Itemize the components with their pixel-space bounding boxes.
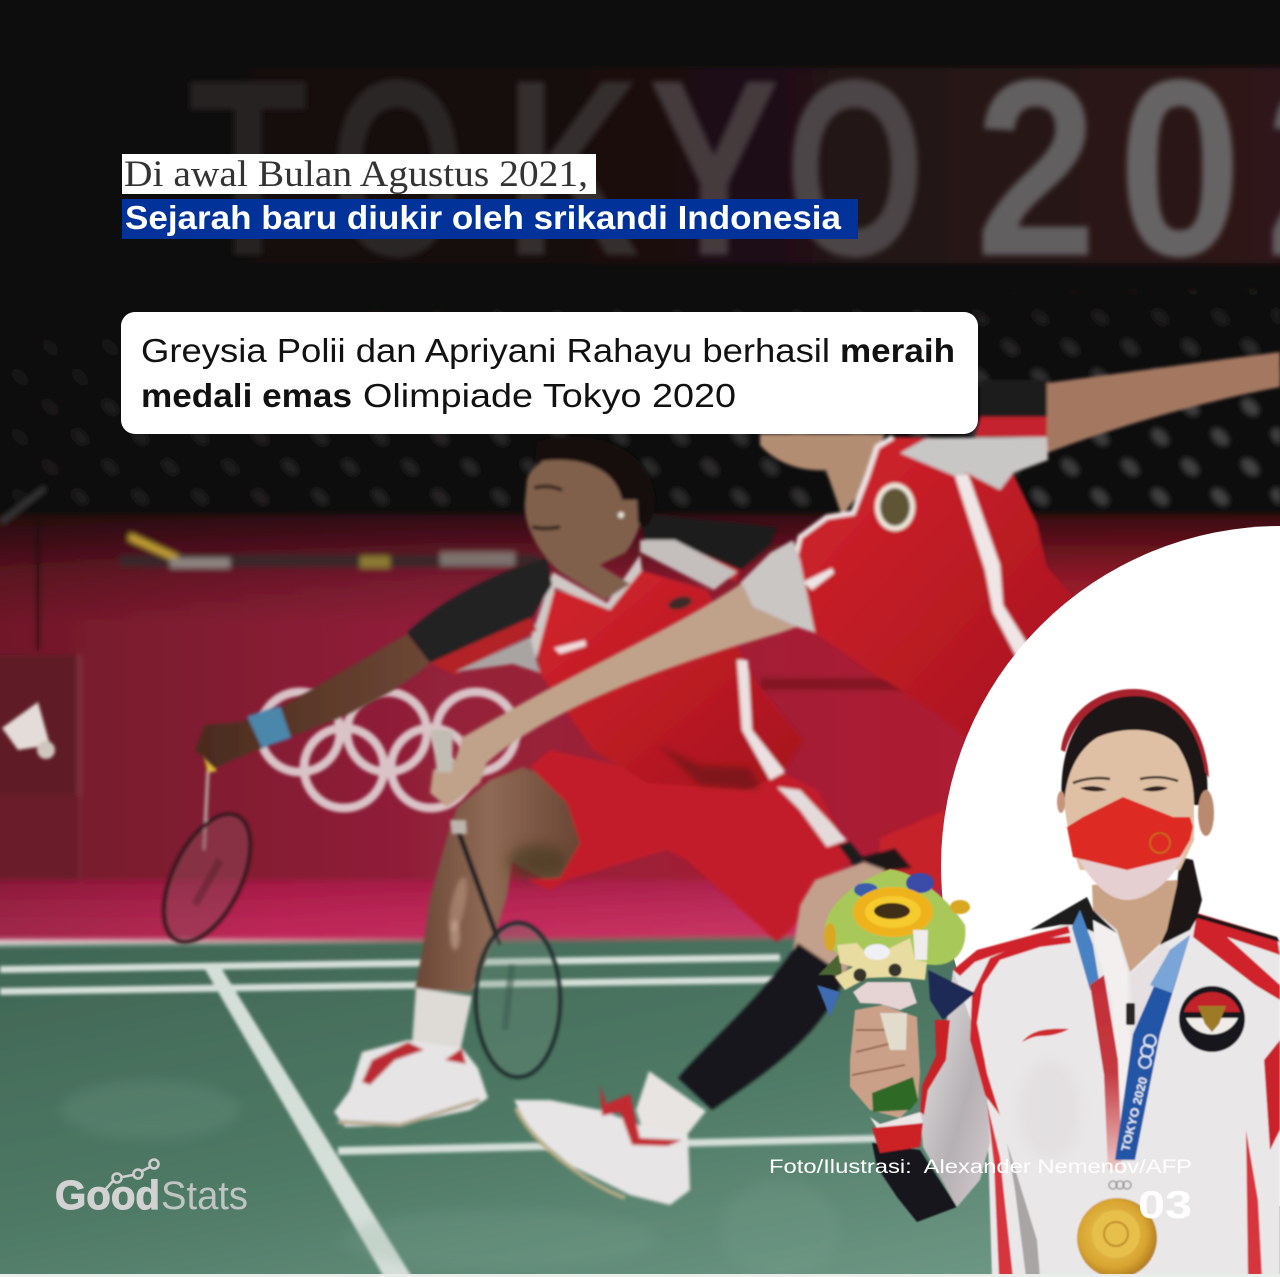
medal ribbon [1072,910,1100,990]
racket of right player [458,830,560,1077]
TOKYO 2020 banner lettering: 2 [975,28,1097,309]
jacket sleeve [920,970,990,1207]
court lines [0,954,880,1277]
sunflower [853,887,933,937]
TOKYO 2020 banner lettering: O [785,28,925,309]
wristband [247,706,291,748]
cream stem [880,1013,907,1050]
leaf stems [872,1077,918,1112]
raised arm [1047,352,1280,453]
shoulder panels [640,513,777,572]
player Apriyani [195,437,866,1127]
photo credit: Foto/Ilustrasi: Alexander Nemenov/AFP [769,1157,1192,1178]
shuttlecock [2,702,55,759]
red lower stripes [987,1103,1013,1277]
callout: meraih [840,332,955,369]
ears [1198,790,1214,836]
navy ribbon [928,970,975,1020]
heading line 2: Sejarah baru diukir oleh srikandi Indonesia [125,199,842,236]
heading [122,153,858,239]
dark sleeve [407,558,552,663]
headband [1061,689,1209,778]
logo trend line [105,1160,158,1190]
bouquet wrap [853,982,917,1010]
long arm [430,583,797,807]
TOKYO 2020 banner lettering: 0 [1118,28,1242,309]
small rings above medal [1109,1181,1131,1189]
callout: Greysia Polii dan Apriyani Rahayu berhasil [141,332,830,369]
gray shoulder panel [900,437,1048,490]
back leg thigh [793,862,885,990]
sock [412,988,472,1052]
TOKYO 2020 banner lettering: O [330,28,465,309]
Olympic rings on wall [260,692,516,808]
red cuff [872,1123,923,1153]
greenery [825,869,965,965]
jacket body [953,910,1280,1277]
mascot [835,930,928,990]
logo wordmark: Good [55,1172,160,1218]
zipper pull [1126,1003,1135,1025]
ribbon lettering: TOKYO 2020 [1118,1075,1150,1153]
logo on jersey [803,568,834,590]
gray sleeve [740,540,815,633]
TOKYO 2020 banner lettering: K [505,28,640,309]
inner collar [1093,920,1132,1100]
page number: 03 [1138,1184,1192,1227]
Indonesia emblem [1179,986,1245,1052]
black collar [1030,897,1118,942]
jersey [537,570,803,790]
black knee sleeve [678,943,842,1110]
ponytail and right collar [1160,857,1280,945]
edge highlights [0,1274,1280,1277]
grip [431,730,453,772]
emblem [875,483,915,531]
TOKYO 2020 banner lettering: Y [648,28,780,309]
neckline trim [793,437,893,567]
GoodStats logo: Stats [161,1174,248,1218]
court scuffs [60,1080,840,1277]
Li-Ning logo [1022,1029,1069,1042]
hair [1061,691,1207,805]
portrait: Greysia Polii with bouquet and medal [817,689,1280,1277]
neck [1092,880,1178,972]
sleeve red edge [920,1020,950,1115]
white circular cut-out [941,526,1280,1206]
head and neck [760,434,885,516]
shoe [514,1100,690,1205]
jersey emblem [667,594,693,612]
sleeve black lining [872,1143,957,1222]
racket of left player [146,752,268,955]
mask upper red [1067,797,1193,870]
hand holding bouquet [850,1005,920,1118]
jacket shading [1018,1060,1082,1160]
sleeve end [980,380,1047,420]
front leg [415,767,580,992]
face [1064,730,1194,870]
white side stripe [955,474,1028,656]
mask lower white [1079,855,1184,900]
TOKYO 2020 banner lettering: T [188,28,308,309]
callout [121,312,978,434]
player Greysia [430,352,1280,1205]
heading line 1: Di awal Bulan Agustus 2021, [124,153,588,194]
rings on ribbon [1139,1035,1156,1068]
white cuff edge [870,1112,923,1130]
shorts stripes [777,787,847,847]
callout: Olimpiade Tokyo 2020 [363,377,736,414]
red shoulder stripes left [953,926,1070,976]
shorts [528,750,853,942]
gray panel [1007,1143,1040,1277]
callout: medali emas [141,377,352,414]
eyes and eyebrows [1080,786,1168,791]
TOKYO 2020 banner lettering [188,28,1280,309]
jersey torso [793,437,1073,745]
head [525,450,642,600]
far shorts and hem [880,810,945,890]
gold medal [1077,1198,1157,1277]
shoe [334,1040,488,1127]
arm [195,634,430,768]
sock [636,1071,706,1136]
GoodStats logo [55,1160,248,1218]
